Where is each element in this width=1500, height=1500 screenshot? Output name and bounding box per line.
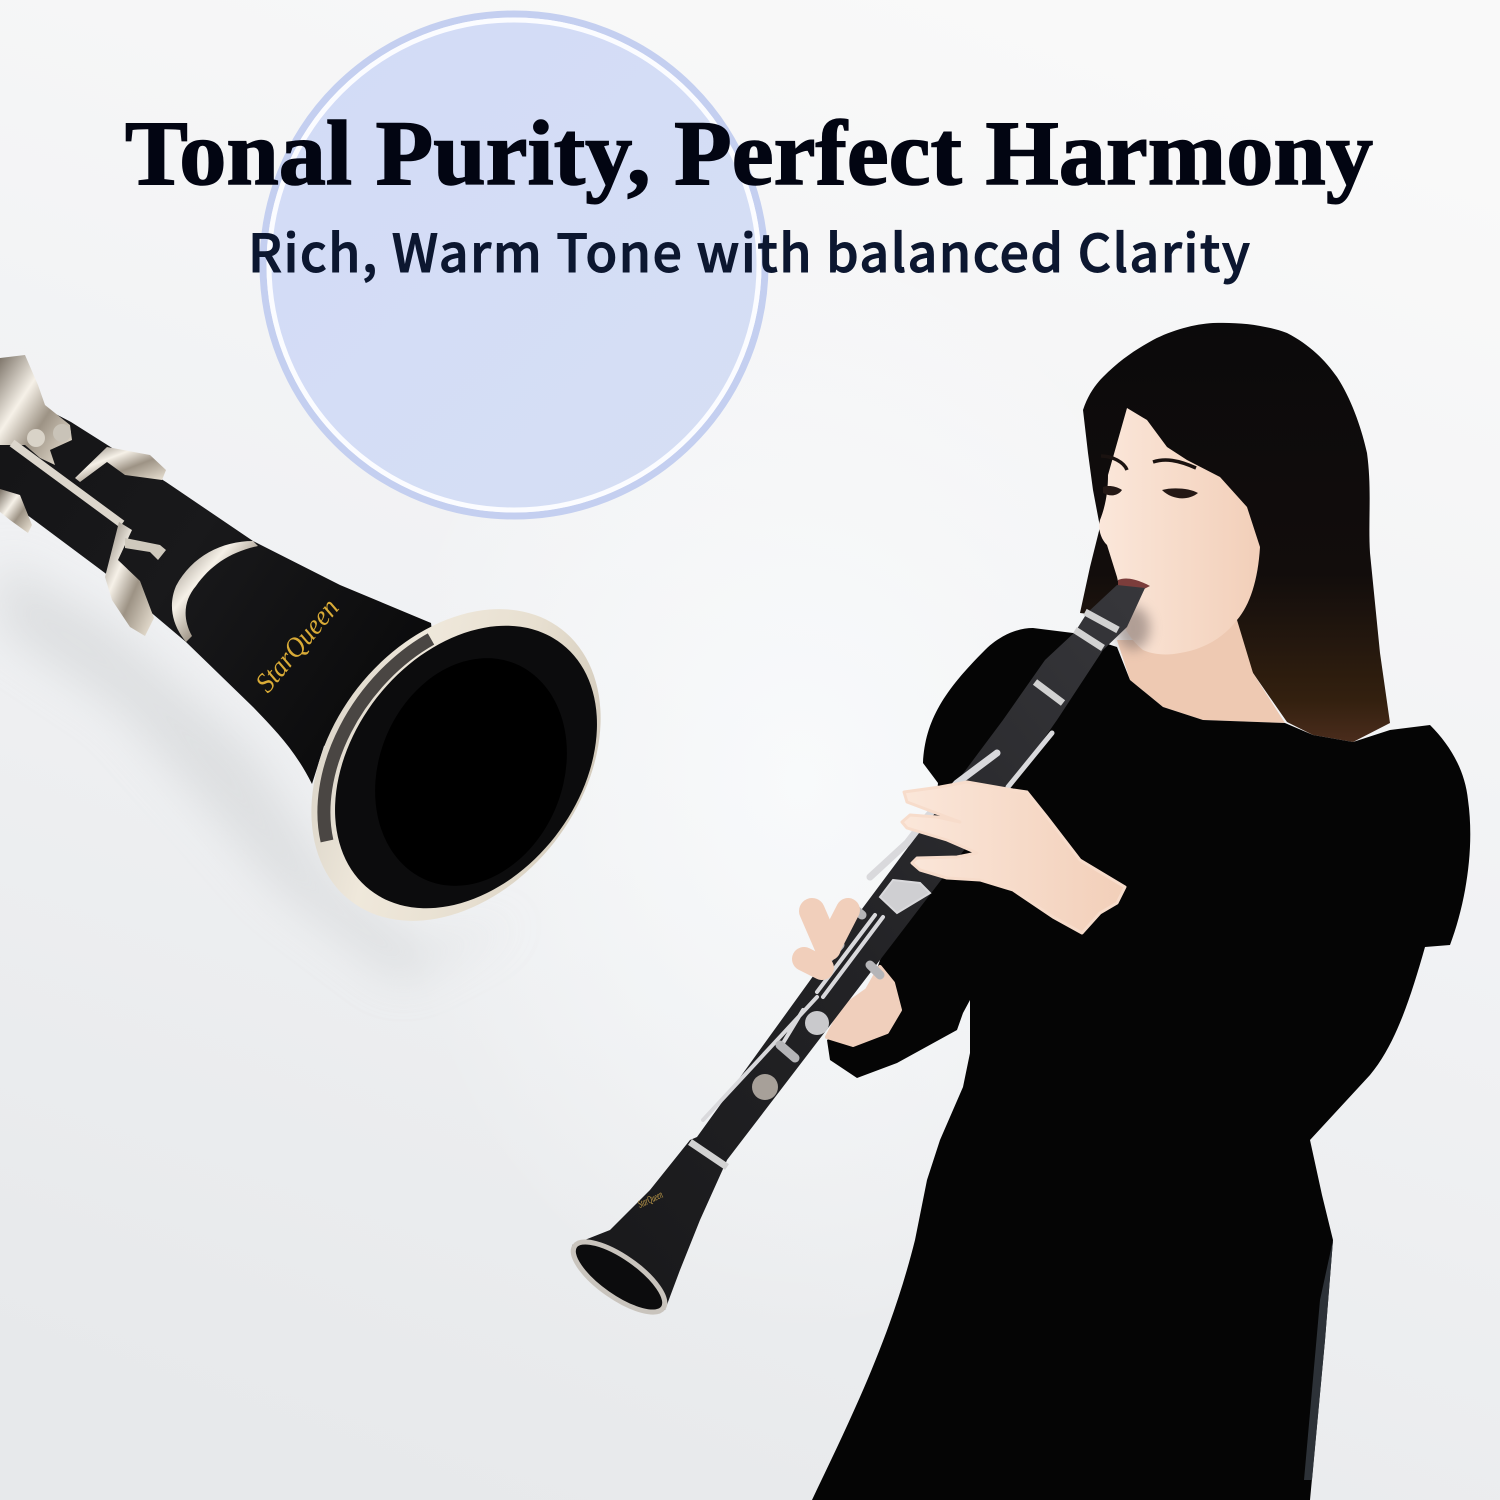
bell rim bbox=[252, 553, 660, 977]
silver ring bbox=[172, 541, 258, 642]
decorative circle bbox=[263, 14, 765, 516]
clarinet body bbox=[0, 385, 440, 784]
metal rings bbox=[690, 612, 1118, 1167]
lower palm bbox=[827, 967, 900, 1045]
hair bbox=[1080, 323, 1390, 742]
key discs bbox=[752, 1011, 829, 1100]
soft shadow bbox=[0, 560, 520, 980]
bore opening bbox=[342, 629, 600, 915]
bell mouth bbox=[563, 1230, 675, 1324]
keywork bbox=[0, 355, 166, 636]
tube bbox=[572, 585, 1145, 1310]
large clarinet bell bbox=[0, 355, 660, 980]
upper hand bbox=[902, 782, 1125, 933]
keys bbox=[703, 733, 1052, 1120]
facial features bbox=[1101, 456, 1198, 650]
neck bbox=[1117, 620, 1285, 723]
subtitle: Rich, Warm Tone with balanced Clarity bbox=[248, 212, 1250, 287]
small clarinet bbox=[563, 585, 1145, 1324]
woman bbox=[563, 323, 1470, 1500]
lower hand fingers bbox=[804, 910, 848, 968]
dress highlight bbox=[1304, 1240, 1333, 1480]
rim inner bbox=[281, 575, 651, 959]
brand signature: StarQueen bbox=[250, 593, 345, 698]
signature: StarQueen bbox=[636, 1189, 665, 1211]
dress bbox=[812, 628, 1470, 1500]
face bbox=[1099, 408, 1260, 654]
rim reflection bbox=[324, 639, 431, 841]
title: Tonal Purity, Perfect Harmony bbox=[125, 102, 1373, 204]
